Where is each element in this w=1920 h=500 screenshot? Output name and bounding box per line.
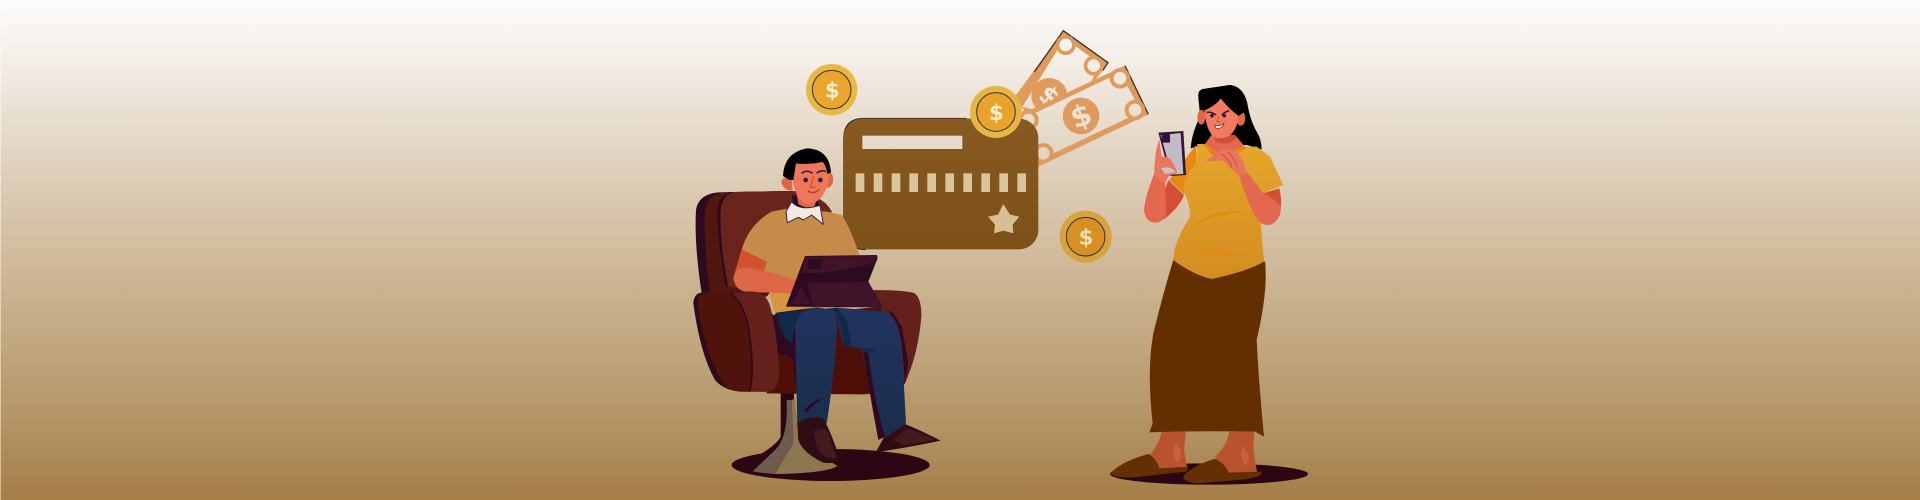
neck xyxy=(792,195,820,210)
banknote: back xyxy=(1010,31,1108,114)
card number blocks xyxy=(856,173,1026,192)
hand on phone xyxy=(1154,139,1177,183)
shirt xyxy=(1173,144,1283,279)
ears xyxy=(781,178,793,191)
face xyxy=(792,160,829,204)
banknote: front: $ xyxy=(1066,97,1096,135)
sleeve shadow xyxy=(1169,145,1197,194)
credit card xyxy=(843,119,1038,250)
slippers xyxy=(1110,454,1262,483)
coin: top left xyxy=(806,64,857,115)
card signature strip xyxy=(862,136,962,149)
right shoe xyxy=(877,424,941,452)
skirt xyxy=(1149,260,1266,437)
neck xyxy=(1205,133,1245,159)
coin: on card xyxy=(970,86,1022,138)
man in armchair xyxy=(693,148,941,481)
collar xyxy=(786,202,823,224)
chair stand xyxy=(740,393,837,474)
raised arm xyxy=(1144,172,1166,223)
ears xyxy=(1197,110,1205,125)
chair right arm xyxy=(873,290,921,383)
money and card group xyxy=(806,31,1148,263)
tablet xyxy=(786,255,883,307)
coin: lower right: $ xyxy=(1079,226,1093,251)
pointing arm xyxy=(1205,149,1281,225)
hair xyxy=(783,148,831,180)
shirt folds xyxy=(1189,211,1248,255)
head xyxy=(1197,85,1247,138)
fringe xyxy=(1198,85,1247,116)
right arm xyxy=(733,249,797,293)
left shoe xyxy=(797,417,839,463)
torso xyxy=(742,208,860,314)
chair seat xyxy=(767,303,920,394)
coin: top left: $ xyxy=(825,78,840,103)
woman with phone xyxy=(1110,85,1308,485)
head xyxy=(781,148,833,224)
coin: lower right xyxy=(1060,211,1112,263)
legs xyxy=(1147,432,1257,473)
chair left arm xyxy=(693,292,779,392)
front jeans leg xyxy=(773,307,852,423)
card star xyxy=(988,204,1019,233)
hair back xyxy=(1191,85,1262,149)
floor shadow xyxy=(1110,463,1308,485)
back jeans leg xyxy=(775,308,906,438)
coin: on card: $ xyxy=(989,101,1004,126)
banknote: back: $ xyxy=(1034,78,1065,113)
face xyxy=(1204,97,1238,138)
banknote: front xyxy=(1015,66,1148,167)
chair back xyxy=(696,191,832,297)
phone xyxy=(1158,131,1186,176)
floor shadow xyxy=(732,449,930,481)
